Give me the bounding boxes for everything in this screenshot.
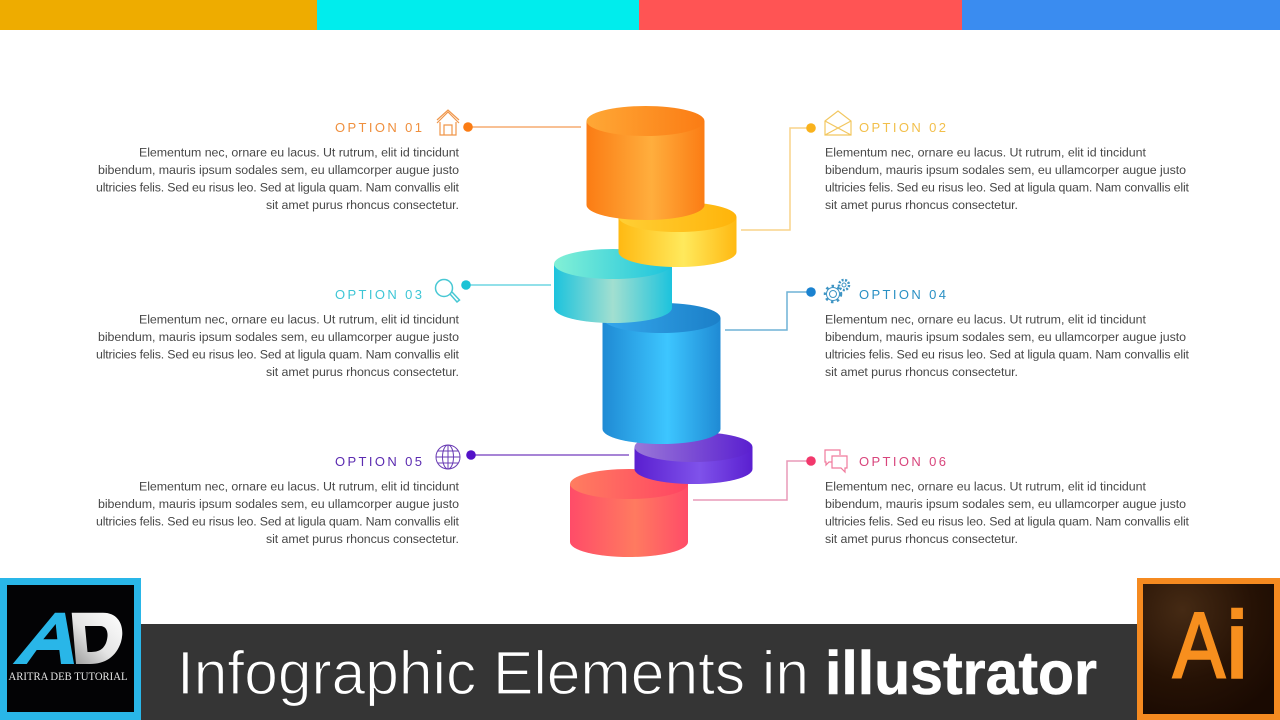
- cylinder: teal: [554, 249, 672, 323]
- text block 01: ultricies felis. Sed eu risus leo. Sed at ligula quam. Nam convallis elit: [96, 180, 460, 194]
- icon: envelope: [825, 111, 851, 135]
- text block 04: [825, 312, 1190, 379]
- text block 03: Elementum nec, ornare eu lacus. Ut rutrum, elit id tincidunt: [139, 312, 460, 326]
- heading 04: OPTION 04: [859, 287, 946, 302]
- text block 01: bibendum, mauris ipsum sodales sem, eu ullamcorper augue justo: [98, 163, 459, 177]
- text block 02: Elementum nec, ornare eu lacus. Ut rutrum, elit id tincidunt: [825, 146, 1147, 160]
- text block 03: ultricies felis. Sed eu risus leo. Sed at ligula quam. Nam convallis elit: [96, 348, 460, 362]
- text block 03: bibendum, mauris ipsum sodales sem, eu ullamcorper augue justo: [98, 330, 459, 344]
- text block 02: ultricies felis. Sed eu risus leo. Sed at ligula quam. Nam convallis elit: [825, 180, 1190, 194]
- title banner: [141, 624, 1137, 720]
- text block 01: [96, 146, 460, 212]
- text block 02: sit amet purus rhoncus consectetur.: [825, 198, 1018, 212]
- cylinder: orange: [586, 106, 704, 220]
- text block 01: Elementum nec, ornare eu lacus. Ut rutrum, elit id tincidunt: [139, 146, 460, 160]
- letter A: [13, 613, 74, 664]
- connector 05: [466, 450, 629, 460]
- cylinder: yellow: [618, 202, 736, 267]
- connector 06: [693, 456, 816, 500]
- text block 02: [825, 146, 1190, 212]
- text block 01: sit amet purus rhoncus consectetur.: [266, 198, 459, 212]
- text block 05: [96, 480, 460, 546]
- text block 05: bibendum, mauris ipsum sodales sem, eu ullamcorper augue justo: [98, 497, 459, 511]
- cylinder: red: [570, 469, 688, 557]
- text block 06: [825, 480, 1190, 546]
- cylinder: blue: [602, 303, 720, 444]
- title text: [177, 639, 1097, 707]
- text block 06: sit amet purus rhoncus consectetur.: [825, 532, 1018, 546]
- text block 05: sit amet purus rhoncus consectetur.: [266, 532, 459, 546]
- icon: magnifier: [436, 280, 460, 302]
- heading 05: OPTION 05: [335, 454, 422, 469]
- text block 04: Elementum nec, ornare eu lacus. Ut rutrum, elit id tincidunt: [825, 312, 1147, 326]
- title text: illustrator: [825, 639, 1097, 707]
- text block 04: ultricies felis. Sed eu risus leo. Sed at ligula quam. Nam convallis elit: [825, 348, 1190, 362]
- connector 01: [463, 122, 581, 132]
- heading 06: OPTION 06: [859, 454, 946, 469]
- panel: option 02: [741, 111, 1190, 230]
- connector 04: [725, 287, 816, 330]
- panel: option 05: [96, 445, 629, 546]
- text block 02: bibendum, mauris ipsum sodales sem, eu ullamcorper augue justo: [825, 163, 1186, 177]
- icon: globe: [436, 445, 460, 469]
- cylinder: purple: [634, 432, 752, 484]
- heading 03: OPTION 03: [335, 287, 422, 302]
- panel: option 06: [693, 450, 1190, 546]
- text block 04: bibendum, mauris ipsum sodales sem, eu ullamcorper augue justo: [825, 330, 1186, 344]
- connector 02: [741, 123, 816, 230]
- logo caption: ARITRA DEB TUTORIAL: [8, 669, 128, 683]
- text block 06: ultricies felis. Sed eu risus leo. Sed at ligula quam. Nam convallis elit: [825, 514, 1190, 528]
- text block 06: bibendum, mauris ipsum sodales sem, eu ullamcorper augue justo: [825, 497, 1186, 511]
- text block 05: Elementum nec, ornare eu lacus. Ut rutrum, elit id tincidunt: [139, 480, 460, 494]
- text block 05: ultricies felis. Sed eu risus leo. Sed at ligula quam. Nam convallis elit: [96, 514, 460, 528]
- title text: Infographic Elements in: [177, 639, 809, 707]
- icon: gears: [825, 280, 849, 302]
- chart: stacked 3D cylinders: [554, 106, 752, 557]
- connector 03: [461, 280, 551, 290]
- text block 03: sit amet purus rhoncus consectetur.: [266, 365, 459, 379]
- text block 03: [96, 312, 460, 379]
- panel: option 03: [96, 280, 551, 379]
- icon: house: [437, 110, 459, 135]
- letter D: [72, 613, 122, 664]
- top colour bar: [0, 0, 1280, 30]
- logo: Aritra Deb Tutorial: [0, 578, 141, 720]
- Ai lettering: i: [1227, 593, 1247, 697]
- text block 04: sit amet purus rhoncus consectetur.: [825, 365, 1018, 379]
- panel: option 04: [725, 280, 1190, 379]
- logo: Adobe Illustrator: [1137, 578, 1280, 720]
- heading 01: OPTION 01: [335, 120, 422, 135]
- text block 06: Elementum nec, ornare eu lacus. Ut rutrum, elit id tincidunt: [825, 480, 1147, 494]
- heading 02: OPTION 02: [859, 120, 946, 135]
- icon: speech bubbles: [825, 450, 847, 472]
- Ai lettering: A: [1173, 593, 1225, 697]
- panel: option 01: [96, 110, 581, 212]
